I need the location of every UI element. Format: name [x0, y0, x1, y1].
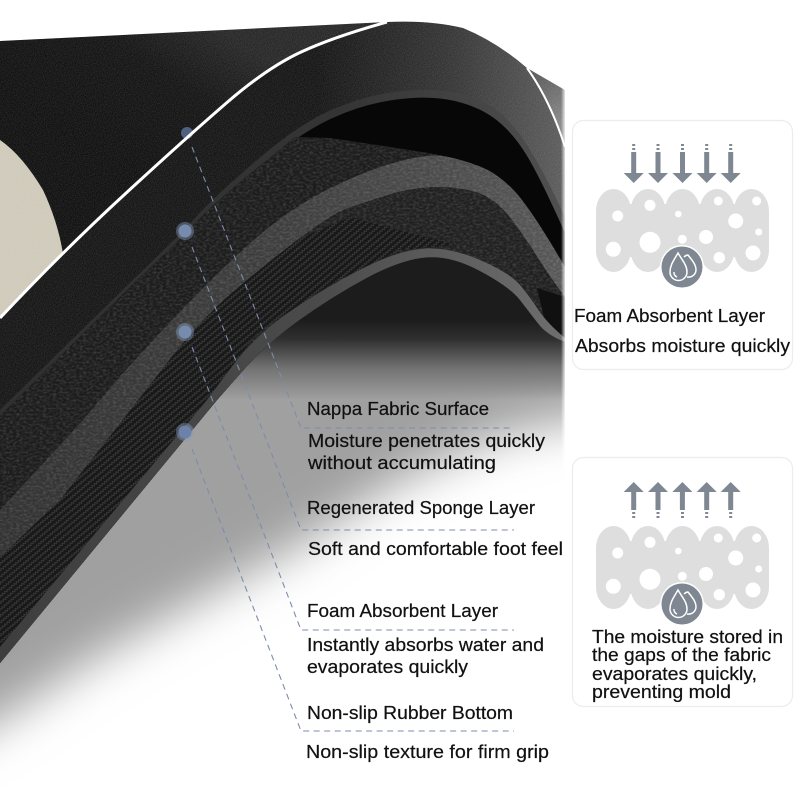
panel: absorption — [572, 120, 792, 370]
panel caption: Absorbs moisture quickly — [575, 335, 791, 356]
panel caption: the gaps of the fabric — [592, 645, 771, 665]
label: nappa fabric surface — [307, 398, 546, 473]
panel heading: Foam Absorbent Layer — [574, 305, 765, 326]
lower rubber strip — [0, 248, 565, 663]
label: foam absorbent layer: Foam Absorbent Layer — [307, 600, 498, 621]
panel caption — [592, 627, 783, 702]
label: foam absorbent layer — [307, 600, 544, 677]
foam diagram — [596, 189, 769, 272]
nappa fabric layer edge — [0, 22, 565, 663]
marker dot: foam — [176, 323, 194, 341]
label: non-slip rubber bottom: Non-slip Rubber Bottom — [307, 702, 513, 723]
label: nappa fabric surface: Nappa Fabric Surface — [307, 398, 489, 419]
floor shadow under the mat — [0, 257, 565, 754]
dark face of regenerated sponge — [0, 137, 565, 663]
white edge line at right — [527, 68, 565, 147]
marker dot: sponge — [176, 222, 194, 240]
label: nappa fabric surface: without accumulating — [307, 452, 496, 473]
upper surface of the mat — [0, 22, 382, 251]
label: nappa fabric surface: Moisture penetrates quickly — [308, 430, 546, 451]
label: non-slip rubber bottom — [306, 702, 549, 762]
label: regenerated sponge layer — [307, 497, 563, 559]
leader line: rubber — [192, 449, 514, 731]
icon: water drops — [660, 582, 704, 626]
arrows pointing down — [624, 144, 741, 183]
panel: evaporation — [572, 458, 792, 706]
back sheet at right edge — [529, 69, 565, 144]
label: non-slip rubber bottom: Non-slip texture for firm grip — [306, 741, 549, 762]
marker dot: rubber — [176, 423, 194, 441]
black gap between layers — [0, 98, 565, 663]
label: foam absorbent layer: evaporates quickly — [307, 656, 469, 677]
upper grey band — [0, 90, 564, 416]
leader line: nappa fabric — [192, 147, 514, 428]
label: foam absorbent layer: Instantly absorbs water and — [307, 634, 544, 655]
leader line: foam — [192, 347, 514, 630]
label: regenerated sponge layer: Soft and comfortable foot feel — [308, 538, 563, 559]
layered mat cross-section — [0, 22, 565, 663]
black corner at right — [537, 288, 565, 340]
panel caption: The moisture stored in — [592, 627, 783, 647]
soft right edge fade — [561, 88, 565, 448]
lighter sponge band — [0, 156, 565, 556]
leader line: sponge — [192, 247, 514, 530]
arrows pointing up — [624, 482, 741, 518]
beige surface patch — [0, 140, 63, 318]
foam diagram — [596, 526, 769, 609]
white edge line — [0, 22, 387, 318]
dark underside of sponge — [90, 187, 564, 554]
icon: water drops — [660, 245, 704, 289]
panel caption: preventing mold — [592, 682, 731, 702]
label: regenerated sponge layer: Regenerated Sponge Layer — [307, 497, 535, 518]
panel caption: evaporates quickly, — [592, 664, 757, 684]
marker dot: top surface — [181, 127, 193, 139]
woven foam absorbent layer — [0, 217, 457, 647]
